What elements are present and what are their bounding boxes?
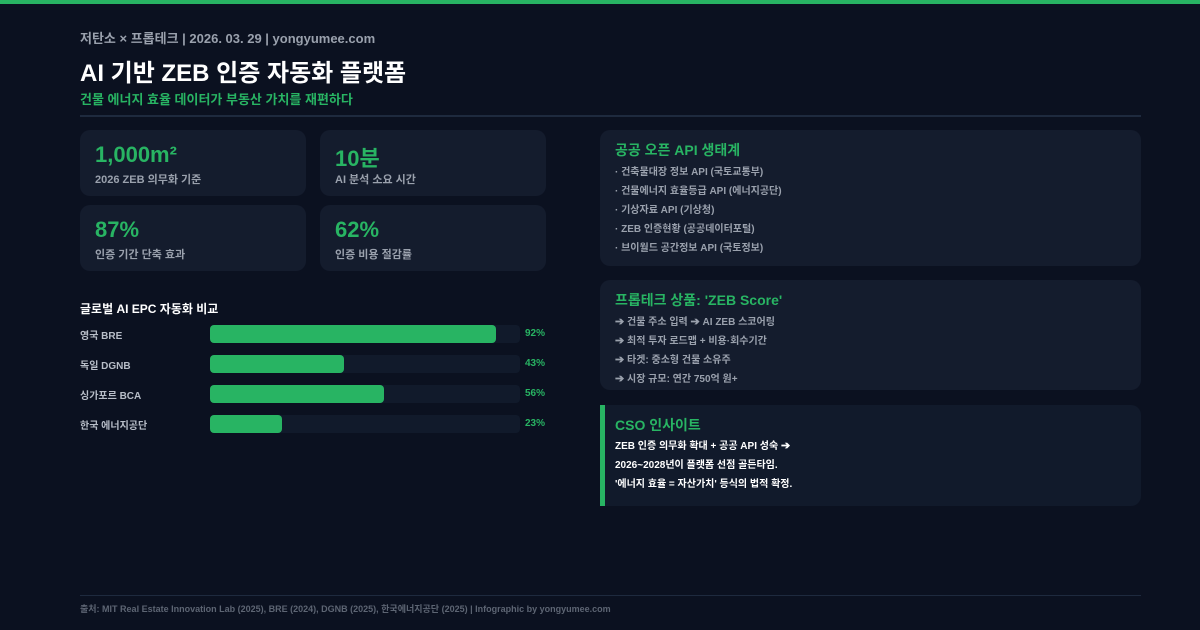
bar: 싱가포르 BCA: 싱가포르 BCA — [80, 391, 141, 402]
subtitle: 건물 에너지 효율 데이터가 부동산 가치를 재편하다 — [80, 92, 353, 107]
panel: public API — [600, 130, 1141, 266]
panel: public API: · 기상자료 API (기상청) — [615, 205, 714, 216]
panel: CSO insight: CSO 인사이트 — [615, 417, 701, 433]
stat: 62%: 인증 비용 절감률 — [335, 249, 412, 261]
chart title: 글로벌 AI EPC 자동화 비교 — [80, 302, 218, 316]
panel: public API: · 건축물대장 정보 API (국토교통부) — [615, 167, 763, 178]
bar chart — [80, 325, 545, 433]
stat: 62% — [320, 205, 546, 271]
panel: public API: · 건물에너지 효율등급 API (에너지공단) — [615, 186, 782, 197]
panel: ZEB Score: 프롭테크 상품: 'ZEB Score' — [615, 292, 782, 308]
stat: 10분 — [320, 130, 546, 196]
bar: 독일 DGNB: 독일 DGNB — [80, 361, 131, 372]
panel: CSO insight: 2026~2028년이 플랫폼 선점 골든타임. — [615, 460, 778, 471]
panel: ZEB Score: ➔ 최적 투자 로드맵 + 비용·회수기간 — [615, 335, 767, 347]
bar: 한국: 한국 에너지공단 — [80, 421, 147, 432]
bar: 독일 DGNB — [80, 355, 545, 373]
panel: CSO insight — [600, 405, 1141, 506]
footer source: 출처: MIT Real Estate Innovation Lab (2025), BRE (2024), DGNB (2025), 한국에너지공단 (2025) | Infographic by yongyumee.com — [80, 604, 611, 614]
stat: 87% — [80, 205, 306, 271]
stat: 62%: 62% — [335, 217, 379, 242]
bar: 한국: 23% — [525, 418, 545, 429]
bar: 싱가포르 BCA — [80, 385, 545, 403]
bar: 영국 BRE: 영국 BRE — [80, 331, 122, 342]
header meta: 저탄소 × 프롭테크 | 2026. 03. 29 | yongyumee.com — [80, 31, 375, 46]
stat: 10분: 10분 — [335, 146, 380, 171]
panel: public API: 공공 오픈 API 생태계 — [615, 142, 740, 158]
stat: 10분: AI 분석 소요 시간 — [335, 174, 416, 186]
panel: ZEB Score: ➔ 타겟: 중소형 건물 소유주 — [615, 354, 731, 366]
stat: 1000m2: 1,000m² — [95, 142, 177, 167]
bar: 영국 BRE: 92% — [525, 328, 545, 339]
panel: ZEB Score — [600, 280, 1141, 390]
panel: ZEB Score: ➔ 건물 주소 입력 ➔ AI ZEB 스코어링 — [615, 316, 775, 328]
panel: ZEB Score: ➔ 시장 규모: 연간 750억 원+ — [615, 373, 738, 385]
panel: CSO insight: ZEB 인증 의무화 확대 + 공공 API 성숙 ➔ — [615, 440, 790, 452]
bar: 독일 DGNB: 43% — [525, 358, 545, 369]
stat: 1000m2: 2026 ZEB 의무화 기준 — [95, 174, 201, 186]
panel: public API: · 브이월드 공간정보 API (국토정보) — [615, 243, 763, 254]
stat: 87%: 87% — [95, 217, 139, 242]
bar: 한국 — [80, 415, 545, 433]
panel: public API: · ZEB 인증현황 (공공데이터포털) — [615, 224, 755, 235]
panel: CSO insight: '에너지 효율 = 자산가치' 등식의 법적 확정. — [615, 479, 792, 490]
stat: 1000m2 — [80, 130, 306, 196]
bar: 싱가포르 BCA: 56% — [525, 388, 545, 399]
title: AI 기반 ZEB 인증 자동화 플랫폼 — [80, 60, 406, 87]
stat: 87%: 인증 기간 단축 효과 — [95, 249, 185, 261]
bar: 영국 BRE — [80, 325, 545, 343]
